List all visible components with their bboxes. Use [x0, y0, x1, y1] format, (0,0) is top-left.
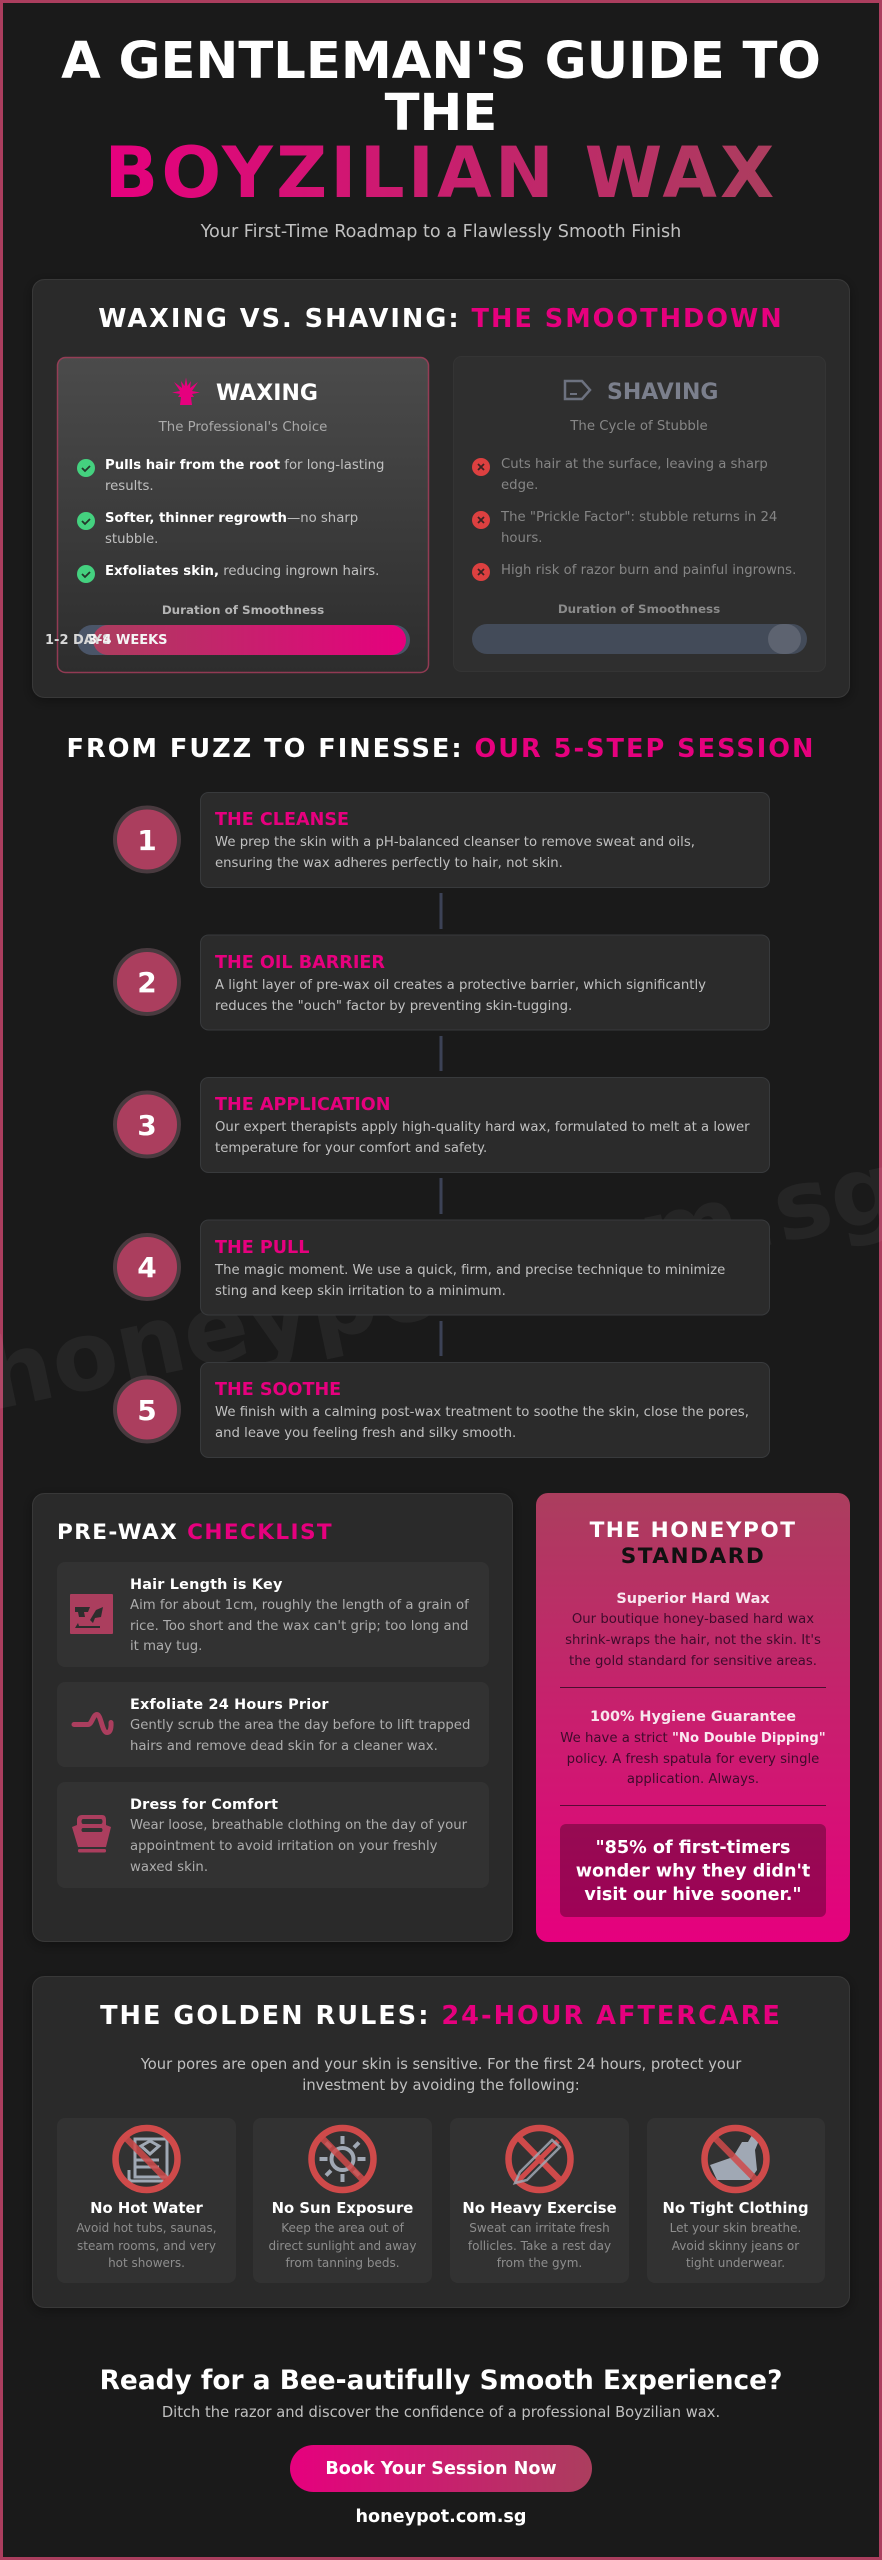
heading: standard [590, 1518, 796, 1569]
rule: no tight clothing [647, 2118, 825, 2283]
button: Book Your Session Now [325, 2459, 557, 2479]
cta subtext: Ditch the razor and discover the confidence of a professional Boyzilian wax. [162, 2404, 720, 2421]
item: hair length: Hair Length is Key [130, 1577, 283, 1593]
title: THE [385, 83, 497, 143]
rule: no exercise: Sweat can irritate fresh [469, 2221, 610, 2235]
item: exfoliate [57, 1682, 489, 1767]
icon: no hot water [116, 2128, 178, 2190]
feature: hygiene: 100% Hygiene Guarantee [590, 1709, 796, 1725]
rule: no tight clothing: tight underwear. [686, 2256, 785, 2270]
step 3: temperature for your comfort and safety. [215, 1141, 487, 1156]
heading: standard: THE HONEYPOT [590, 1518, 796, 1543]
item: dress: Dress for Comfort [130, 1797, 278, 1813]
item: hair length [57, 1562, 489, 1667]
callout: quote: wonder why they didn't [576, 1862, 810, 1882]
rule: no hot water [57, 2118, 236, 2283]
icon: no tight clothing [704, 2128, 766, 2190]
feature: hard wax: shrink-wraps the hair, not the skin. It's [565, 1633, 821, 1648]
list: shaving drawbacks: edge. [501, 478, 538, 493]
step 4 [115, 1220, 770, 1315]
item: dress: appointment to avoid irritation on your freshly [130, 1839, 438, 1854]
card: waxing [45, 358, 428, 672]
callout: quote [560, 1824, 826, 1917]
connectors [440, 893, 442, 1356]
icon: scrub [74, 1714, 111, 1732]
panel: pre-wax checklist [32, 1494, 512, 1942]
item: exfoliate: Gently scrub the area the day before to lift trapped [130, 1718, 470, 1733]
step 2: 2 [137, 966, 157, 999]
cta heading: Ready for a Bee-autifully Smooth Experience? [100, 2365, 782, 2396]
title [61, 31, 821, 214]
website: honeypot.com.sg [356, 2507, 526, 2527]
rule: no tight clothing: Let your skin breathe. [670, 2221, 801, 2235]
panel: waxing vs shaving [32, 280, 850, 698]
waxing title: WAXING [216, 381, 318, 406]
heading: standard: STANDARD [621, 1544, 765, 1569]
icon: razor tag [565, 381, 590, 399]
duration label: Duration of Smoothness [558, 602, 720, 616]
intro text: investment by avoiding the following: [302, 2077, 580, 2094]
rule: no sun: from tanning beds. [285, 2256, 400, 2270]
step 3: Our expert therapists apply high-quality hard wax, formulated to melt at a lower [215, 1120, 750, 1135]
step 1 [115, 792, 770, 888]
shaving title: SHAVING [607, 380, 718, 405]
item: dress: Wear loose, breathable clothing on the day of your [130, 1818, 468, 1833]
heading: checklist: PRE-WAX CHECKLIST [57, 1520, 333, 1545]
rule: no tight clothing: Avoid skinny jeans or [672, 2239, 799, 2253]
intro text [140, 2056, 742, 2094]
rule: no hot water: hot showers. [108, 2256, 185, 2270]
step 5: 5 [137, 1394, 157, 1427]
shaving subtitle: The Cycle of Stubble [569, 419, 708, 434]
waxing subtitle: The Professional's Choice [158, 420, 327, 435]
icon: no sun [312, 2128, 374, 2190]
rule: no tight clothing: No Tight Clothing [662, 2200, 809, 2217]
feature: hard wax: Our boutique honey-based hard wax [572, 1612, 814, 1627]
step 2: THE OIL BARRIER [215, 953, 385, 973]
item: exfoliate: hairs and remove dead skin for a cleaner wax. [130, 1739, 438, 1754]
feature: hygiene: We have a strict "No Double Dipping" [560, 1731, 826, 1746]
rule: no sun: direct sunlight and away [268, 2239, 417, 2253]
list: waxing benefits: results. [105, 479, 154, 494]
step 3 [115, 1078, 770, 1172]
bar: waxing duration: 3-4 WEEKS [88, 633, 168, 648]
step 5: and leave you feeling fresh and silky smooth. [215, 1426, 516, 1441]
feature: hard wax: the gold standard for sensitive areas. [569, 1654, 817, 1669]
rule: no hot water: Avoid hot tubs, saunas, [76, 2221, 217, 2235]
rule: no sun: Keep the area out of [281, 2221, 405, 2235]
item: exfoliate: Exfoliate 24 Hours Prior [130, 1697, 329, 1713]
title: BOYZILIAN WAX [105, 132, 777, 214]
feature: hygiene: application. Always. [627, 1772, 759, 1787]
step 5: THE SOOTHE [215, 1380, 341, 1400]
item: hair length: it may tug. [130, 1639, 202, 1654]
list: shaving drawbacks: Cuts hair at the surface, leaving a sharp [501, 457, 768, 472]
duration label: Duration of Smoothness [162, 603, 324, 617]
list: shaving drawbacks: High risk of razor burn and painful ingrowns. [501, 563, 796, 578]
step 1: ensuring the wax adheres perfectly to hair, not skin. [215, 856, 563, 871]
title: A GENTLEMAN'S GUIDE TO [61, 31, 821, 91]
rule: no exercise: follicles. Take a rest day [468, 2239, 611, 2253]
step 4: THE PULL [215, 1238, 309, 1258]
item: dress [57, 1782, 489, 1888]
list: waxing benefits [77, 458, 384, 583]
list: waxing benefits: stubble. [105, 532, 158, 547]
panel: aftercare [32, 1976, 850, 2308]
rule: no exercise: from the gym. [497, 2256, 582, 2270]
step 2 [115, 935, 770, 1030]
step 3: 3 [137, 1109, 157, 1142]
rule: no hot water: No Hot Water [90, 2200, 204, 2217]
heading: golden rules: THE GOLDEN RULES: 24-HOUR AFTERCARE [100, 2001, 782, 2031]
step 1: THE CLEANSE [215, 810, 349, 830]
rule: no sun: No Sun Exposure [272, 2200, 413, 2217]
heading: smoothdown: WAXING VS. SHAVING: THE SMOOTHDOWN [98, 304, 784, 334]
panel: the honeypot standard [536, 1493, 850, 1942]
feature: hygiene [560, 1709, 826, 1787]
step 4: The magic moment. We use a quick, firm, and precise technique to minimize [214, 1263, 725, 1278]
step 2: A light layer of pre-wax oil creates a protective barrier, which significantly [215, 978, 706, 993]
step 4: 4 [137, 1251, 157, 1284]
step 1: We prep the skin with a pH-balanced cleanser to remove sweat and oils, [215, 835, 695, 850]
rule: no exercise: No Heavy Exercise [462, 2200, 617, 2217]
list: waxing benefits: Pulls hair from the root for long-lasting [105, 458, 384, 473]
list: shaving drawbacks: The "Prickle Factor": stubble returns in 24 [500, 510, 777, 525]
step 1: 1 [137, 824, 157, 857]
callout: quote: visit our hive sooner." [584, 1885, 802, 1905]
step 4: sting and keep skin irritation to a minimum. [215, 1284, 506, 1299]
list: shaving drawbacks: hours. [501, 531, 542, 546]
item: dress: waxed skin. [130, 1860, 208, 1875]
feature: hard wax: Superior Hard Wax [616, 1591, 770, 1607]
feature: hard wax [565, 1591, 821, 1669]
item: hair length: Aim for about 1cm, roughly the length of a grain of [130, 1598, 469, 1613]
icon: no exercise [508, 2128, 570, 2190]
callout: quote: "85% of first-timers [595, 1838, 791, 1858]
bar: shaving duration [472, 624, 807, 654]
list: shaving drawbacks [472, 457, 796, 581]
feature: hygiene: policy. A fresh spatula for every single [567, 1752, 819, 1767]
icon: wax burst [172, 378, 200, 405]
bar: waxing duration: 1-2 DAYS [45, 633, 111, 648]
list: waxing benefits: Exfoliates skin, reducing ingrown hairs. [105, 564, 379, 579]
rule: no exercise [450, 2118, 629, 2283]
rule: no hot water: steam rooms, and very [77, 2239, 216, 2253]
step 5 [115, 1362, 770, 1458]
step 3: THE APPLICATION [215, 1095, 390, 1115]
card: shaving [454, 356, 826, 672]
icon: hair length [70, 1594, 113, 1634]
step 2: reduces the "ouch" factor by preventing skin-tugging. [215, 999, 572, 1014]
list: waxing benefits: Softer, thinner regrowth—no sharp [105, 511, 358, 526]
subtitle: Your First-Time Roadmap to a Flawlessly Smooth Finish [200, 222, 681, 242]
intro text: Your pores are open and your skin is sensitive. For the first 24 hours, protect your [140, 2056, 742, 2073]
icon: clothing basket [72, 1815, 111, 1852]
call to action [100, 2365, 782, 2527]
item: hair length: rice. Too short and the wax can't grip; too long and [130, 1619, 468, 1634]
button [290, 2445, 592, 2492]
rule: no sun [253, 2118, 432, 2283]
bar: waxing duration [45, 625, 410, 655]
step 5: We finish with a calming post-wax treatment to soothe the skin, close the pores, [215, 1405, 749, 1420]
heading: 5-step session: FROM FUZZ TO FINESSE: OUR 5-STEP SESSION [67, 734, 815, 764]
